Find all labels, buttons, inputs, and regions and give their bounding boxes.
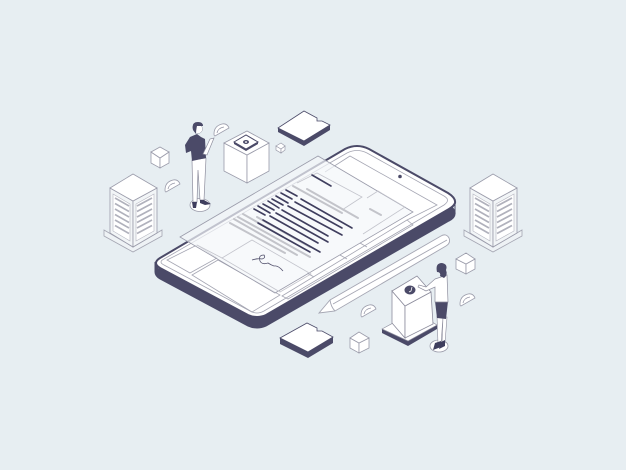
large cube with button [224, 131, 269, 183]
camera dot [398, 175, 402, 178]
glass document sheet [180, 156, 413, 293]
phone screen panels [167, 156, 437, 312]
small cube bottom [350, 332, 369, 353]
dark text lines [254, 175, 352, 252]
podium [382, 276, 437, 346]
person: man with tablet [185, 122, 214, 212]
pencil [319, 235, 450, 313]
person: woman at podium [418, 263, 448, 352]
server tower left [104, 174, 162, 252]
signature [252, 255, 283, 271]
gray text lines [230, 186, 381, 257]
server tower right [464, 174, 522, 252]
half dome right [460, 294, 475, 306]
half dome near pencil [361, 305, 376, 317]
small cube left [151, 147, 169, 168]
memory chip top [278, 111, 330, 146]
half dome top right of man [214, 124, 229, 136]
half dome left [165, 180, 180, 192]
button [234, 135, 258, 151]
tiny cube [276, 143, 285, 153]
phone body [155, 146, 455, 328]
memory chip bottom [280, 323, 333, 358]
small cube right [456, 253, 475, 274]
podium dial [404, 286, 416, 294]
